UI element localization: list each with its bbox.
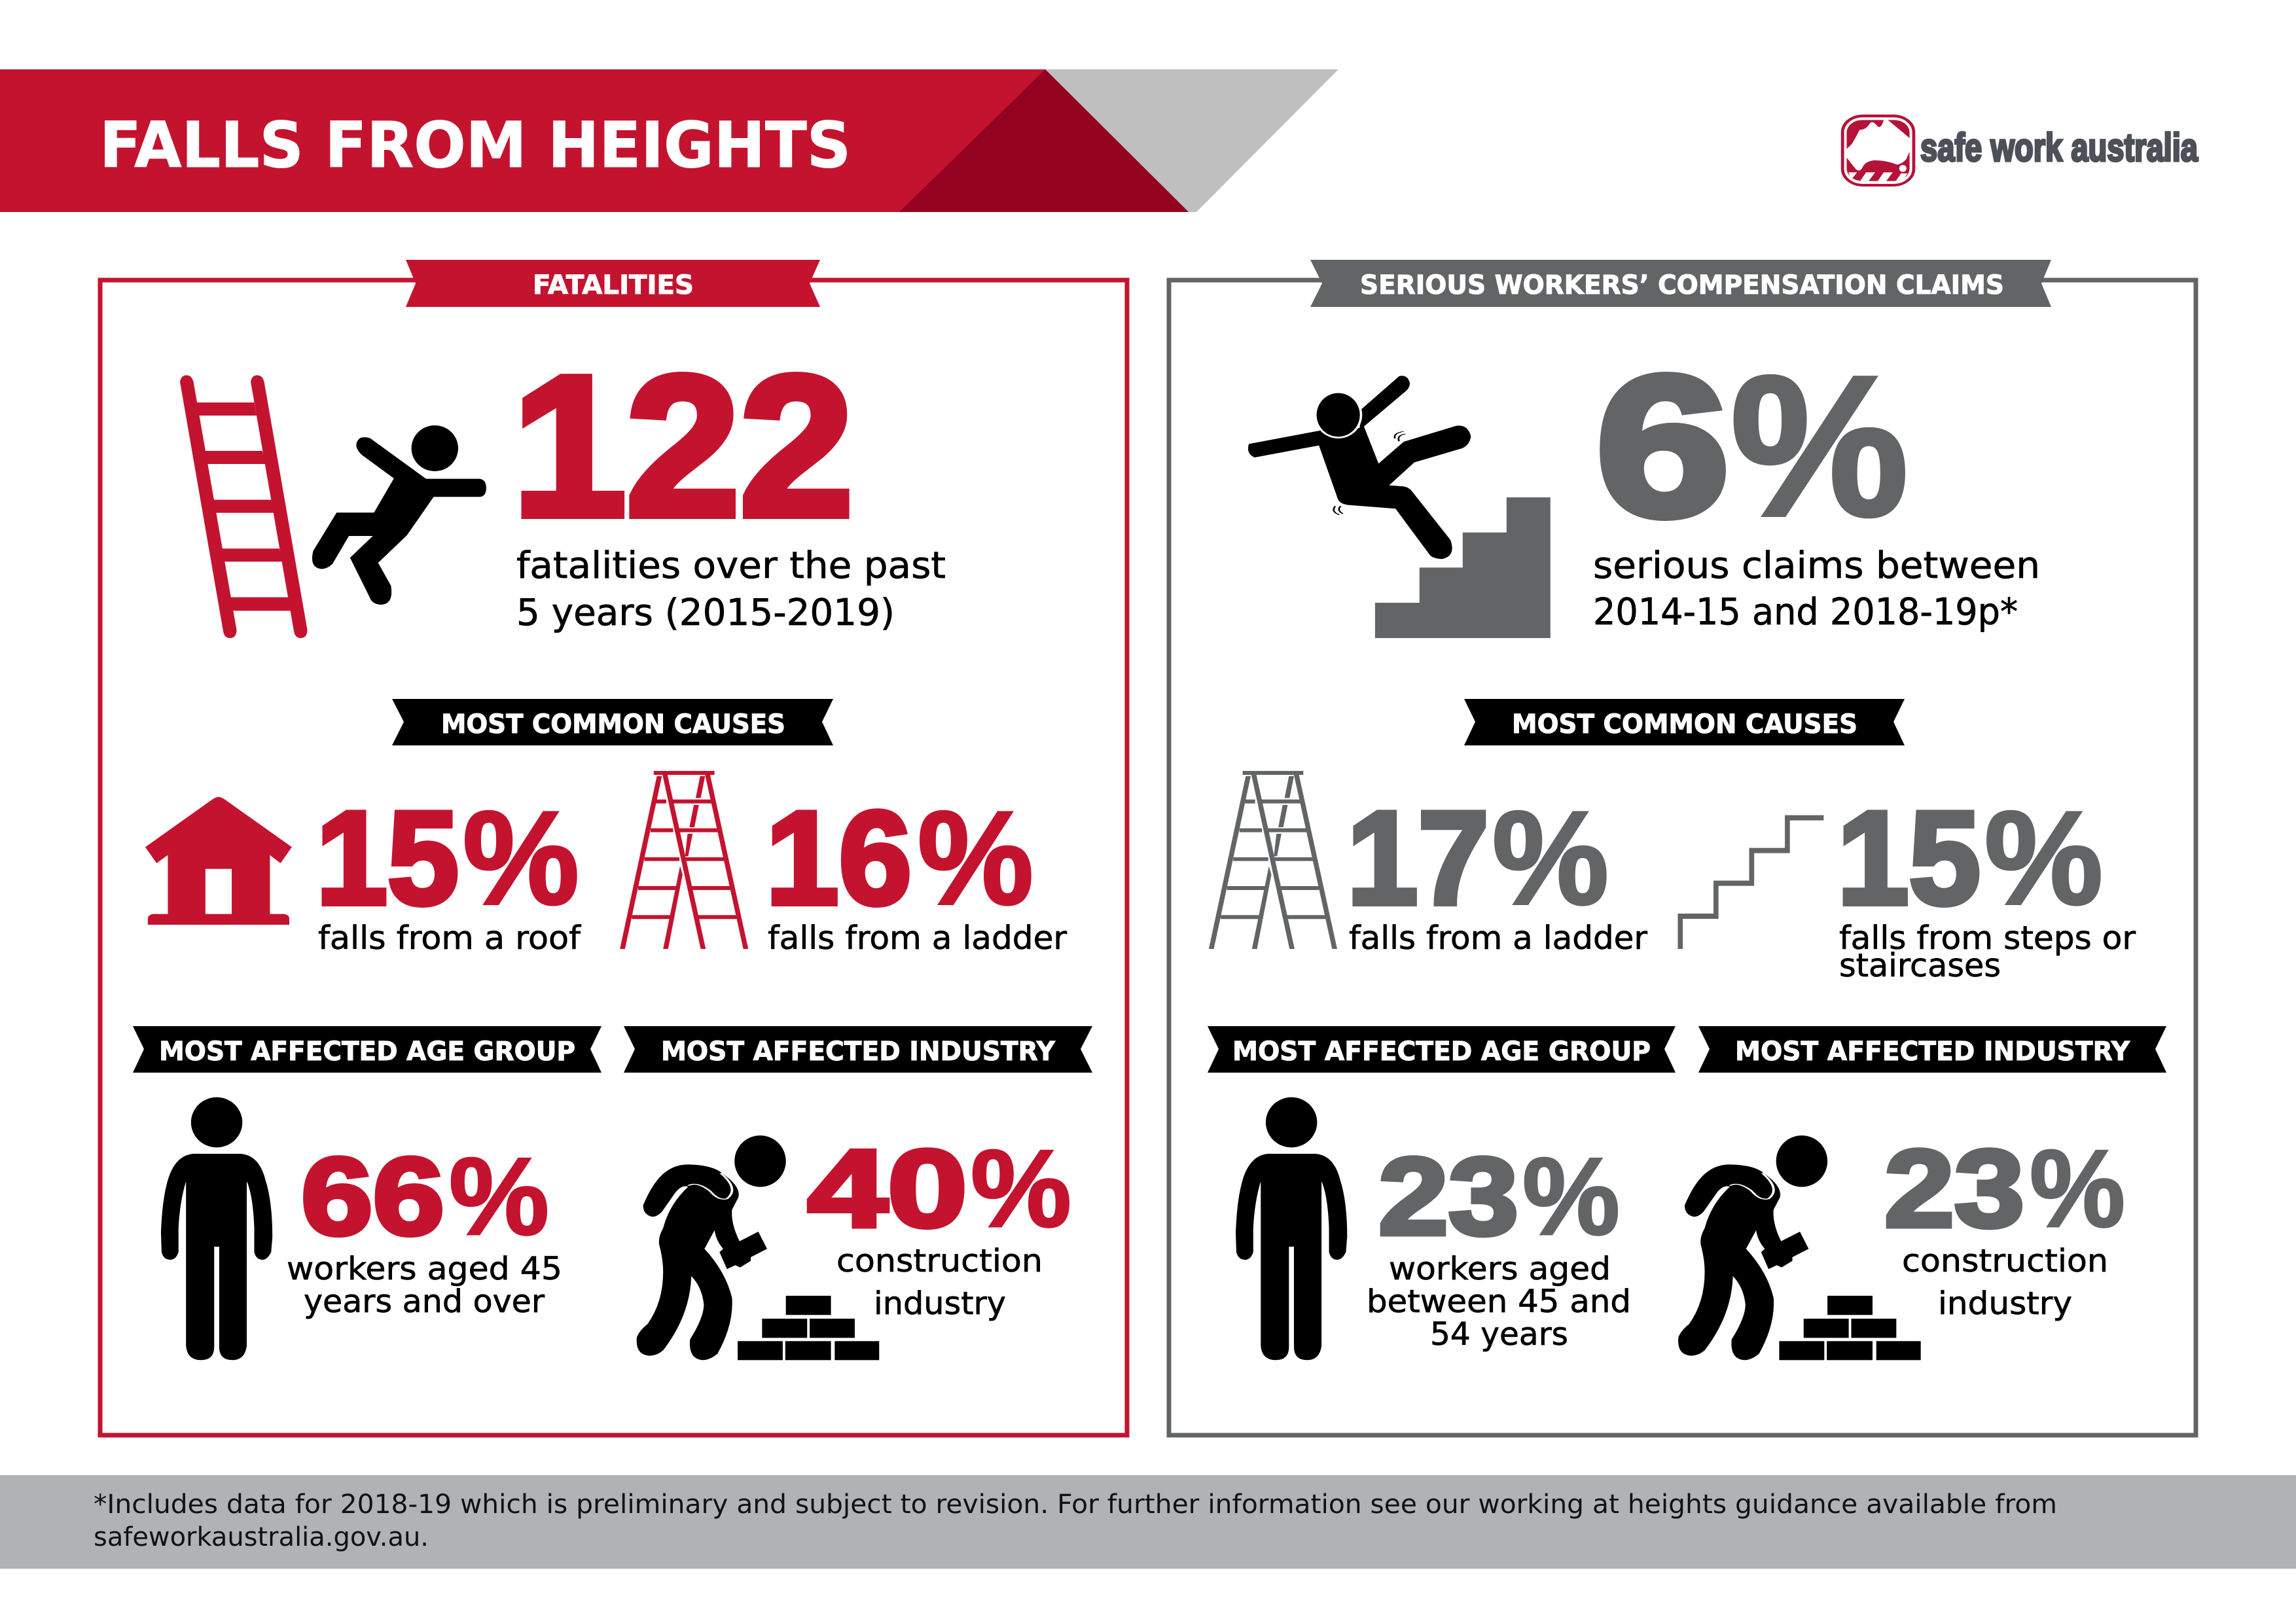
logo: safe work australia: safe work australia (1920, 126, 2198, 169)
text: construction industry: construction (1902, 1243, 2108, 1279)
text: construction industry: industry (1938, 1285, 2072, 1322)
stat: 66%: 66 (301, 1135, 444, 1258)
stat: 23% age (1378, 1135, 1620, 1258)
stat: 15% stairs: 15 (1837, 784, 1981, 933)
text: construction industry (836, 1243, 1043, 1322)
stat: 15% roof: 15 (316, 784, 459, 933)
text: fatalities description: fatalities over the past (516, 544, 946, 587)
text: workers aged between 45 and 54 years: 54 years (1430, 1316, 1568, 1353)
stat: 23% industry: % (2030, 1127, 2125, 1250)
text: construction industry (1902, 1243, 2108, 1322)
stat: 23% industry: 23 (1884, 1127, 2024, 1250)
stat: 16% ladder: % (918, 784, 1033, 933)
stat: 66% (301, 1135, 549, 1258)
footer note: safeworkaustralia.gov.au. (94, 1522, 429, 1552)
ribbon: most affected age group (133, 1026, 601, 1073)
text: falls from a ladder: falls from a ladder (768, 919, 1067, 957)
icon: standing person (1236, 1097, 1347, 1360)
stat: 15% stairs: % (1984, 784, 2103, 933)
stat: 40% (808, 1127, 1071, 1250)
text: falls from a roof: falls from a roof (318, 919, 582, 957)
panel: fatalities (100, 260, 1127, 1435)
text: falls from a ladder: falls from a ladder (1349, 919, 1648, 957)
text: falls from steps or staircases (1839, 919, 2136, 984)
stat: 122: 122 (512, 334, 853, 558)
panel: serious claims (1169, 260, 2196, 1435)
ribbon: fatalities (406, 260, 820, 307)
ribbon: most affected industry: MOST AFFECTED INDUSTRY (1735, 1037, 2130, 1067)
stat: 16% ladder (766, 784, 1033, 933)
stat: 17% (1347, 784, 1609, 933)
stat: 40%: 40 (808, 1127, 967, 1250)
icon: bricks (1779, 1296, 1921, 1360)
stat: 17%: 17 (1347, 784, 1489, 933)
stat: 15% roof: % (463, 784, 579, 933)
text: workers aged 45 and over (287, 1251, 562, 1320)
stat: 23% industry (1884, 1127, 2125, 1250)
icon: step ladder (620, 771, 748, 949)
text: construction industry: construction (836, 1243, 1043, 1279)
icon: standing person (161, 1097, 272, 1360)
icon: ladder (180, 375, 308, 638)
stat: 6%: % (1731, 334, 1909, 558)
ribbon: most common causes (392, 699, 833, 745)
text: workers aged between 45 and 54 years: workers aged (1389, 1251, 1611, 1287)
ribbon: serious workers compensation claims: SERIOUS WORKERS’ COMPENSATION CLAIMS (1360, 270, 2004, 300)
text: falls from steps or staircases: staircases (1839, 947, 2001, 984)
ribbon: most affected age group: MOST AFFECTED AGE GROUP (1232, 1037, 1651, 1067)
icon: stair outline (1677, 815, 1823, 949)
ribbon: most affected industry (1698, 1026, 2166, 1073)
ribbon: most common causes: MOST COMMON CAUSES (1512, 709, 1857, 740)
footer note (0, 1475, 2296, 1569)
text: serious claims description (1593, 544, 2040, 633)
ribbon: most affected industry (624, 1026, 1092, 1073)
ribbon: fatalities: FATALITIES (533, 270, 694, 300)
stat: 6%: 6 (1596, 334, 1730, 558)
icon: house (145, 797, 292, 925)
stat: 40%: % (971, 1127, 1071, 1250)
stat: 16% ladder: 16 (766, 784, 912, 933)
ribbon: most affected age group (1208, 1026, 1676, 1073)
text: workers aged 45 and over: years and over (304, 1283, 545, 1320)
text: fatalities description (516, 544, 946, 634)
text: serious claims description: serious claims between (1593, 544, 2040, 587)
text: construction industry: industry (874, 1285, 1006, 1322)
icon: construction worker (1678, 1135, 1827, 1360)
header banner (0, 69, 1338, 212)
text: workers aged 45 and over: workers aged 45 (287, 1251, 562, 1287)
text: fatalities description: 5 years (2015-2019) (516, 592, 895, 634)
ribbon: most affected industry: MOST AFFECTED INDUSTRY (661, 1037, 1056, 1067)
stat: 23% age: 23 (1378, 1135, 1518, 1258)
stat: 23% age: % (1522, 1135, 1620, 1258)
stat: 15% stairs (1837, 784, 2103, 933)
icon: construction worker (637, 1135, 786, 1360)
logo: safe work australia (1841, 115, 2198, 187)
text: serious claims description: 2014-15 and 2018-19p* (1593, 591, 2018, 633)
text: workers aged between 45 and 54 years: between 45 and (1367, 1283, 1631, 1320)
icon: bricks (738, 1296, 879, 1360)
text: workers aged between 45 and 54 years (1367, 1251, 1631, 1353)
stat: 15% roof (316, 784, 579, 933)
icon: person falling down stairs (1248, 376, 1471, 559)
ribbon: most affected age group: MOST AFFECTED AGE GROUP (159, 1037, 575, 1067)
ribbon: most common causes: MOST COMMON CAUSES (441, 709, 785, 740)
stat: 6% (1596, 334, 1909, 558)
title: FALLS FROM HEIGHTS (99, 109, 851, 182)
footer note: *Includes data for 2018-19 which is preliminary and subject to revision. For further information see our working at heights guidance available from (94, 1489, 2057, 1520)
icon: step ladder (1209, 771, 1337, 949)
icon: falling person (312, 425, 486, 605)
stat: 66%: % (449, 1135, 549, 1258)
text: falls from steps or staircases: falls from steps or (1839, 919, 2136, 957)
ribbon: most common causes (1464, 699, 1905, 745)
icon: stairs block (1375, 497, 1551, 638)
stat: 17%: % (1492, 784, 1609, 933)
ribbon: serious workers compensation claims (1310, 260, 2051, 307)
